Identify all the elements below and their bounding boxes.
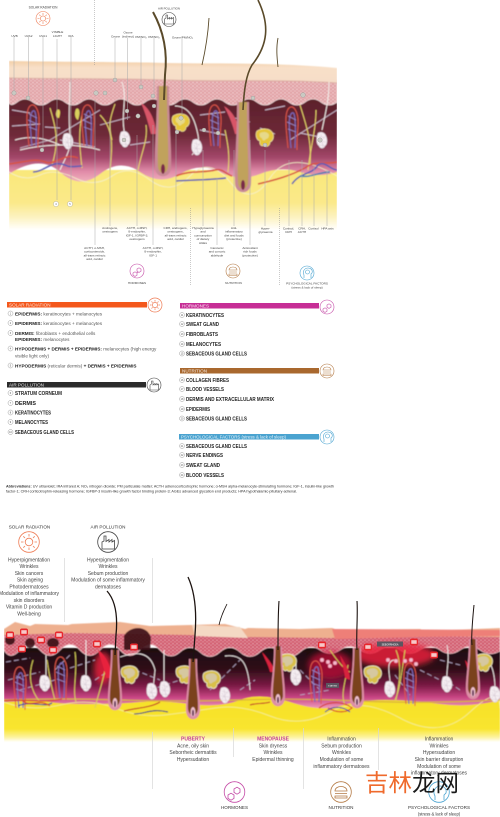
icon: psychological large bbox=[408, 782, 470, 816]
psychological items bbox=[180, 444, 247, 479]
factor labels below top diagram: oestrogens, bbox=[167, 230, 184, 234]
watermark: 龙网 bbox=[412, 770, 459, 796]
watermark bbox=[365, 770, 459, 796]
psychological items: 23 bbox=[181, 464, 184, 467]
factor labels below top diagram: IGF-1 bbox=[149, 253, 157, 257]
bottom column: solar radiation: skin disorders bbox=[14, 598, 45, 604]
pollution items bbox=[8, 390, 74, 436]
sebaceous glands bbox=[121, 666, 138, 683]
nutrition items bbox=[180, 378, 274, 422]
hormone items: FIBROBLASTS bbox=[186, 332, 218, 338]
psychological items: SWEAT GLAND bbox=[186, 463, 220, 469]
hormone items: KERATINOCYTES bbox=[186, 313, 224, 319]
inflamed areas bbox=[355, 643, 435, 667]
icon: sun badge bbox=[148, 298, 162, 312]
text: psychological effects bbox=[411, 736, 468, 777]
text: nutrition effects: Inflammation bbox=[327, 736, 356, 742]
red lesion markers bbox=[6, 628, 438, 658]
bottom column: air pollution bbox=[71, 524, 145, 590]
hairs bbox=[107, 577, 474, 662]
factor labels below top diagram: IGF-1, IGFBP-3, bbox=[126, 233, 148, 237]
psychological items: BLOOD VESSELS bbox=[186, 473, 224, 479]
factor labels below top diagram: ß-endorphin, bbox=[144, 250, 162, 254]
icon: psychological factors: PSYCHOLOGICAL FACTORS bbox=[286, 282, 328, 286]
solar items bbox=[8, 311, 157, 368]
factor labels below top diagram: ACTH, α-MSH, bbox=[84, 246, 105, 250]
heading bar bbox=[180, 368, 319, 374]
solar items: 2 bbox=[10, 322, 12, 325]
capillary loops bbox=[27, 105, 39, 148]
icon: hormones: HORMONES bbox=[128, 281, 146, 285]
bottom column: solar radiation: Skin ageing bbox=[17, 578, 43, 584]
icon: psychological large: PSYCHOLOGICAL FACTORS bbox=[408, 805, 470, 810]
nutrition items: 20 bbox=[181, 418, 184, 420]
bottom skin diagram bbox=[4, 577, 500, 742]
solar items: 5 bbox=[10, 364, 12, 368]
text: puberty: Hypersudation bbox=[177, 757, 209, 763]
text: nutrition effects bbox=[313, 736, 370, 770]
nerve fibres bbox=[50, 104, 316, 172]
dotted separators bbox=[94, 0, 280, 285]
heading bar: PSYCHOLOGICAL FACTORS (stress & lack of sleep) bbox=[181, 434, 286, 440]
solar items: HYPODERMIS + DERMIS + EPIDERMIS: melanocytes (high energy bbox=[15, 346, 157, 352]
factor labels below top diagram: of dietary bbox=[197, 237, 210, 241]
pale fatty lobule outlines bbox=[9, 162, 337, 194]
stratum corneum bbox=[4, 622, 500, 638]
bottom column: solar radiation bbox=[0, 524, 60, 618]
nutrition items: 18 bbox=[181, 398, 184, 401]
abbreviations bbox=[6, 484, 334, 494]
nutrition items: COLLAGEN FIBRES bbox=[186, 378, 229, 384]
icon: sun large bbox=[19, 532, 39, 552]
icon: factory large bbox=[98, 532, 118, 552]
nutrition items: DERMIS AND EXTRACELLULAR MATRIX bbox=[186, 397, 274, 403]
sebaceous glands bbox=[172, 114, 189, 131]
factor labels below top diagram: (protective) bbox=[242, 253, 258, 257]
text: nutrition effects: Modulation of some bbox=[320, 757, 364, 763]
solar items: HYPODERMIS (reticular dermis) + DERMIS + EPIDERMIS bbox=[15, 364, 136, 368]
heading bar: HORMONES bbox=[182, 304, 209, 308]
factor labels below top diagram: acid, cardiol bbox=[167, 237, 184, 241]
leader lines: top diagram bbox=[14, 37, 327, 245]
factor labels below top diagram: Cortisol, bbox=[283, 226, 294, 230]
heading bar bbox=[7, 382, 146, 388]
psychological items: 22 bbox=[181, 454, 184, 457]
epidermis bbox=[9, 78, 337, 105]
factor labels below top diagram: AGEs bbox=[199, 241, 207, 245]
icon: sun bbox=[36, 12, 50, 26]
psychological items: SEBACEOUS GLAND CELLS bbox=[186, 444, 247, 450]
factor labels below top diagram: Hyper- bbox=[261, 226, 270, 230]
watermark: 吉林 bbox=[365, 770, 412, 796]
text: puberty: Seborrheic dermatitis bbox=[169, 750, 217, 756]
dermis bbox=[4, 648, 500, 708]
text: puberty bbox=[169, 736, 217, 763]
spectrum and pollutant labels: VISIBLE bbox=[52, 30, 63, 34]
factor labels below top diagram: oestrogens bbox=[129, 237, 145, 241]
nerve fibres bbox=[30, 650, 405, 708]
factor labels below top diagram: aldehyde bbox=[211, 253, 224, 257]
factor labels below top diagram: all-trans retinoic bbox=[165, 233, 187, 237]
dark callout tags bbox=[326, 642, 403, 688]
stratum corneum bbox=[9, 61, 337, 83]
hypodermis bbox=[4, 695, 500, 742]
icon: hormones large bbox=[221, 782, 248, 810]
follicles bbox=[155, 86, 171, 176]
psychological items: NERVE ENDINGS bbox=[186, 453, 223, 459]
factor labels below top diagram: (protective) bbox=[226, 237, 242, 241]
panel: solar radiation list bbox=[7, 298, 162, 368]
solar items: 1 bbox=[10, 312, 12, 316]
icon: nutrition large: NUTRITION bbox=[328, 805, 354, 810]
factor labels below top diagram: inflammatory bbox=[225, 230, 243, 234]
bottom column: solar radiation: Hyperpigmentation bbox=[8, 558, 50, 564]
spectrum and pollutant labels: UVA2 bbox=[25, 34, 33, 38]
heading bar bbox=[180, 303, 319, 308]
factor labels below top diagram: corticosteroids, bbox=[84, 250, 105, 254]
bottom column: solar radiation: SOLAR RADIATION bbox=[9, 524, 50, 530]
inflammatory cells bbox=[320, 658, 418, 668]
sweat gland clusters bbox=[63, 133, 73, 149]
nutrition items: 17 bbox=[181, 388, 184, 391]
bottom column: air pollution: Hyperpigmentation bbox=[87, 558, 129, 564]
factor labels below top diagram: ACTH, α-MSH, bbox=[143, 246, 163, 250]
icon: factory badge bbox=[147, 378, 161, 392]
spectrum and pollutant labels: PM/NO₂ bbox=[135, 35, 147, 39]
factor labels below top diagram: CRH, androgens, bbox=[164, 226, 188, 230]
panel: hormones list bbox=[180, 300, 334, 358]
factor labels below top diagram: Anti- bbox=[231, 226, 237, 230]
solar items: EPIDERMIS: keratinocytes + melanocytes bbox=[15, 321, 103, 326]
solar items: DERMIS: fibroblasts + endothelial cells bbox=[15, 331, 96, 336]
dermal fibres bbox=[6, 655, 460, 695]
pollution items: KERATINOCYTES bbox=[15, 410, 51, 416]
bottom column: solar radiation: Wrinkles bbox=[19, 564, 39, 570]
panel: air pollution list bbox=[7, 378, 161, 436]
top label: solar radiation: SOLAR RADIATION bbox=[29, 6, 58, 10]
spectrum and pollutant labels: UVB bbox=[11, 34, 18, 38]
hormone items: 11 bbox=[181, 314, 184, 317]
factor labels below top diagram: Hypoglycaemia bbox=[192, 226, 214, 230]
text: puberty: Acne, oily skin bbox=[177, 744, 209, 750]
icon: psychological factors: (stress & lack of sleep) bbox=[291, 286, 323, 290]
dermis bbox=[9, 96, 337, 182]
factor labels below top diagram: Carotenic bbox=[210, 246, 224, 250]
dividers for bottom section bbox=[64, 558, 378, 789]
factor labels below top diagram: diet and foods bbox=[224, 233, 244, 237]
spectrum and pollutant labels bbox=[11, 30, 194, 40]
pollution items: DERMIS bbox=[15, 401, 36, 407]
nutrition items: 19 bbox=[181, 408, 184, 411]
bottom column: solar radiation: Modulation of inflammatory bbox=[0, 591, 60, 597]
spectrum and pollutant labels: IRA bbox=[68, 34, 75, 38]
icon: hormones large: HORMONES bbox=[221, 805, 248, 810]
panel: nutrition list bbox=[180, 364, 334, 422]
icon: hormones bbox=[128, 264, 146, 285]
solar items: EPIDERMIS: melanocytes bbox=[15, 337, 70, 342]
factor labels below top diagram: Antioxidant bbox=[242, 246, 258, 250]
text: psychological effects: Skin barrier disruption bbox=[415, 757, 464, 763]
icon: psychological factors bbox=[286, 266, 328, 290]
numbered markers on top diagram: 5 bbox=[69, 203, 71, 206]
white nerve strands bbox=[15, 82, 329, 170]
nutrition items: 16 bbox=[181, 379, 184, 382]
bottom column: solar radiation: Vitamin D production bbox=[6, 605, 52, 611]
epidermis bbox=[4, 632, 500, 656]
nutrition items: SEBACEOUS GLAND CELLS bbox=[186, 416, 247, 422]
factor labels below top diagram: rich foods bbox=[243, 250, 257, 254]
hormone items: 13 bbox=[181, 333, 184, 336]
factor labels below top diagram: acid, cardiol bbox=[86, 257, 103, 261]
bottom column: solar radiation: Skin cancers bbox=[15, 571, 44, 577]
heading bar: NUTRITION bbox=[182, 368, 207, 374]
bottom column: air pollution: Modulation of some inflammatory bbox=[71, 578, 145, 584]
factor labels below top diagram: and conoxic bbox=[209, 250, 226, 254]
solar items: 3 bbox=[10, 332, 12, 335]
factor labels below top diagram: glycaemia bbox=[259, 230, 273, 234]
factor labels below top diagram bbox=[84, 226, 334, 261]
top skin diagram bbox=[9, 0, 337, 230]
factor labels below top diagram: and bbox=[200, 230, 206, 234]
text: psychological effects: Inflammation bbox=[425, 736, 454, 742]
text: menopause: Wrinkles bbox=[263, 750, 283, 756]
icon: head badge bbox=[320, 430, 334, 444]
text: menopause bbox=[252, 736, 294, 763]
text: nutrition effects: Wrinkles bbox=[332, 750, 352, 756]
text: nutrition effects: inflammatory dermatoses bbox=[313, 764, 370, 770]
pollution items: STRATUM CORNEUM bbox=[15, 391, 62, 397]
text: nutrition effects: Sebum production bbox=[321, 744, 362, 750]
dark callout tags: STATINS bbox=[328, 684, 337, 688]
top label: solar radiation bbox=[29, 6, 58, 26]
text: menopause: MENOPAUSE bbox=[257, 736, 290, 742]
bottom column: air pollution: AIR POLLUTION bbox=[91, 524, 125, 530]
nutrition items: EPIDERMIS bbox=[186, 407, 210, 413]
factor labels below top diagram: Cortisol bbox=[308, 226, 319, 230]
bottom column: solar radiation: Well-being bbox=[17, 612, 41, 618]
bottom column: air pollution: Wrinkles bbox=[98, 564, 118, 570]
icon: factory bbox=[162, 12, 176, 26]
abbreviations: Abbreviations: UV ultraviolet; IRA infrared A; NO₂ nitrogen dioxide; PM particulate matter; ACTH adrenocorticotrophic hormone; α-MSH alpha-melanocyte-stimulating hormone; IGF-1, insulin-like growth bbox=[6, 484, 334, 488]
numbered markers on top diagram: 4 bbox=[55, 203, 57, 206]
sweat gland clusters bbox=[40, 675, 50, 691]
icon: nutrition: NUTRITION bbox=[225, 281, 242, 285]
pollution items: 10 bbox=[9, 431, 12, 434]
icon: nutrition bbox=[225, 264, 242, 285]
dermal fibres bbox=[12, 106, 337, 148]
bottom column: solar radiation: Photodermatoses bbox=[9, 584, 49, 590]
pollution items: 6 bbox=[10, 392, 12, 395]
capillary loops bbox=[14, 667, 26, 710]
text: psychological effects: inflammatory dermatoses bbox=[411, 771, 468, 777]
bottom column: air pollution: dermatoses bbox=[95, 584, 122, 590]
arrector pili muscles bbox=[141, 103, 156, 134]
factor labels below top diagram: oestrogens bbox=[102, 230, 118, 234]
numbered markers on top diagram bbox=[12, 78, 322, 207]
spectrum and pollutant labels: Ozone/PM/NO₂ bbox=[172, 36, 194, 40]
solar items: visible light only) bbox=[15, 354, 50, 358]
top label: air pollution bbox=[158, 6, 180, 26]
hormone items: SWEAT GLAND bbox=[186, 322, 219, 328]
factor labels below top diagram: consumption bbox=[194, 233, 212, 237]
arrector pili muscles bbox=[98, 650, 112, 678]
hormone items: MELANOCYTES bbox=[186, 342, 221, 348]
spectrum and pollutant labels: PM/NO₂ bbox=[148, 35, 160, 39]
hormone items: 12 bbox=[181, 323, 184, 326]
pollution items: 7 bbox=[10, 402, 12, 405]
text: psychological effects: Hypersudation bbox=[423, 750, 455, 756]
text: psychological effects: Modulation of some bbox=[417, 764, 461, 770]
heading bar: SOLAR RADIATION bbox=[9, 302, 51, 308]
pollution items: 8 bbox=[10, 412, 12, 414]
heading bar bbox=[7, 302, 147, 308]
dark callout tags: SEBORRHOEA bbox=[382, 643, 399, 646]
top label: air pollution: AIR POLLUTION bbox=[158, 6, 180, 10]
hormone items: 14 bbox=[181, 343, 184, 346]
white nerve strands bbox=[46, 640, 495, 690]
spectrum and pollutant labels: (indirect) bbox=[122, 34, 134, 38]
hormone items bbox=[180, 312, 247, 358]
heading bar: AIR POLLUTION bbox=[9, 382, 44, 388]
spectrum and pollutant labels: LIGHT bbox=[53, 34, 62, 38]
hypodermis bbox=[9, 170, 337, 230]
factor labels below top diagram: CRH, bbox=[298, 226, 306, 230]
psychological items: 24 bbox=[181, 474, 184, 477]
blood vessels bbox=[9, 156, 337, 184]
pollution items: SEBACEOUS GLAND CELLS bbox=[15, 430, 74, 436]
icon: hormone badge bbox=[320, 300, 334, 314]
blood vessels bbox=[4, 699, 352, 714]
factor labels below top diagram: ACTH, α-MSH, bbox=[127, 226, 147, 230]
icon: nutrition large bbox=[328, 782, 354, 810]
dark pigment spots bbox=[5, 628, 151, 650]
solar items: 4 bbox=[10, 348, 12, 350]
bottom column: air pollution: Sebum production bbox=[88, 571, 129, 577]
text: menopause: Skin dryness bbox=[259, 744, 288, 750]
text: menopause: Epidermal thinning bbox=[252, 757, 294, 763]
fat lobule outlines bbox=[4, 697, 500, 728]
icon: burger badge bbox=[320, 364, 334, 378]
golden band at dermis base bbox=[4, 699, 500, 702]
factor labels below top diagram: ß-endorphin, bbox=[128, 230, 146, 234]
spectrum and pollutant labels: Ozone bbox=[111, 34, 120, 38]
pollution items: MELANOCYTES bbox=[15, 420, 48, 426]
factor labels below top diagram: ACTH bbox=[298, 230, 306, 234]
pollution items: 9 bbox=[10, 421, 12, 424]
spectrum and pollutant labels: UVA1 bbox=[39, 34, 47, 38]
abbreviations: factor-1; CRH corticotrophin-releasing hormone; IGFBP-3 insulin-like growth factor binding protein-3; AGEs advanced glycation end products; HPA hypothalamic-pituitary-adrenal. bbox=[6, 490, 297, 494]
text: psychological effects: Wrinkles bbox=[429, 744, 449, 750]
solar items: EPIDERMIS: keratinocytes + melanocytes bbox=[15, 312, 103, 316]
hairs bbox=[153, 0, 278, 110]
hormone items: 15 bbox=[181, 352, 184, 356]
panel: psychological factors list bbox=[179, 430, 334, 479]
factor labels below top diagram: Androgens, bbox=[102, 226, 118, 230]
factor labels below top diagram: CRH bbox=[285, 230, 292, 234]
psychological items: 21 bbox=[181, 445, 184, 448]
nutrition items: BLOOD VESSELS bbox=[186, 387, 224, 393]
hormone items: SEBACEOUS GLAND CELLS bbox=[186, 352, 247, 358]
text: puberty: PUBERTY bbox=[181, 736, 206, 742]
factor labels below top diagram: all-trans retinoic bbox=[84, 253, 106, 257]
follicles bbox=[108, 650, 122, 710]
factor labels below top diagram: HPA axis bbox=[321, 226, 334, 230]
icon: psychological large: (stress & lack of sleep) bbox=[418, 812, 461, 816]
spectrum and pollutant labels: Ozone bbox=[123, 30, 133, 34]
